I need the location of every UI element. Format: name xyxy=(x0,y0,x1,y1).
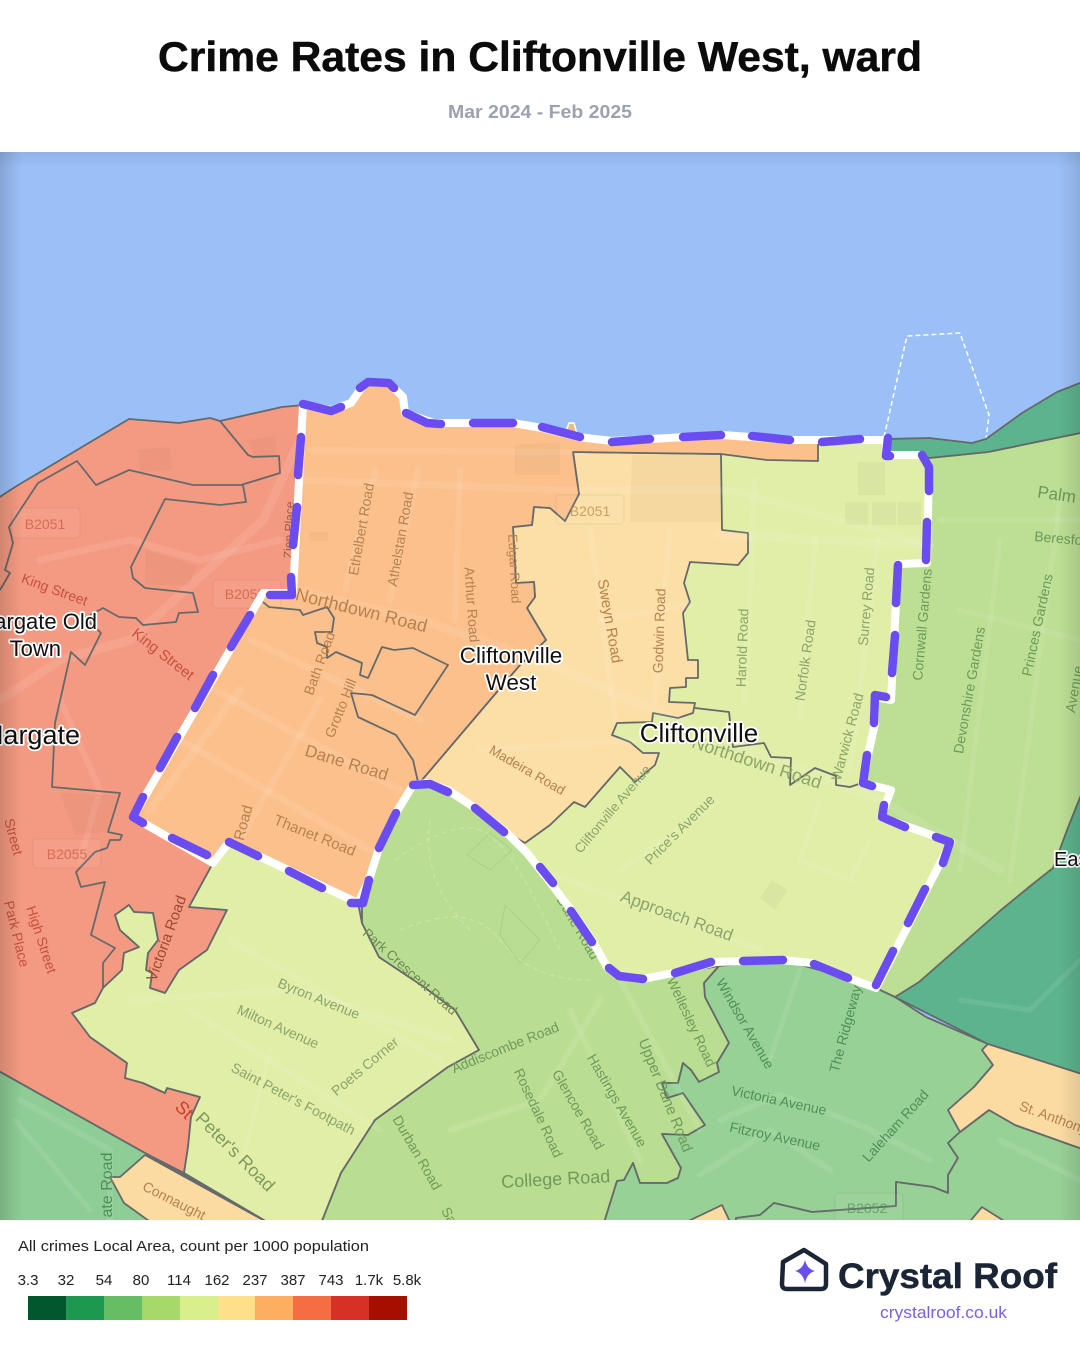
region: red west Margate xyxy=(0,405,303,1173)
road labels: red area: Zion Place xyxy=(281,501,297,558)
road labels: mid green areas xyxy=(99,482,1080,1227)
road labels: lime areas: Harold Road xyxy=(733,608,751,687)
pier outline xyxy=(884,333,989,443)
region: lime green east xyxy=(860,432,1080,997)
road labels: lime areas: Byron Avenue xyxy=(276,975,362,1022)
region: ward tan xyxy=(413,452,748,843)
place: Cliftonville West: Cliftonville xyxy=(460,643,562,668)
road labels: mid green areas: Wellesley Road xyxy=(664,975,719,1069)
logo url: crystalroof.co.uk xyxy=(880,1304,1008,1322)
logo: Crystal Roof xyxy=(782,1250,1057,1322)
road labels: tan edge areas xyxy=(140,1098,1080,1223)
road labels: mid green areas: Cornwall Gardens xyxy=(909,568,935,681)
jetty xyxy=(566,423,577,434)
road labels: red area: High Street xyxy=(23,904,60,975)
road labels: orange ward: Ethelbert Road xyxy=(345,482,377,577)
place: Cliftonville West: West xyxy=(486,670,537,695)
region: mid green Dane Park xyxy=(320,784,729,1226)
road labels: orange ward: Dane Road xyxy=(303,741,391,784)
park outlines xyxy=(467,833,540,963)
region: tan bottom right patch xyxy=(970,1206,1004,1220)
legend values: 80 xyxy=(133,1272,149,1289)
region: lime St Peter's xyxy=(72,842,479,1226)
road labels: red area: Victoria Road xyxy=(143,893,190,984)
region: green Victoria Avenue xyxy=(603,960,993,1226)
boundary lines: west Margate xyxy=(0,421,280,590)
road labels: mid green areas: Devonshire Gardens xyxy=(950,626,988,755)
road labels: red area: Street xyxy=(1,817,26,857)
place: Cliftonville West xyxy=(460,643,562,695)
choropleth map xyxy=(0,152,1080,1227)
road labels: orange ward: Bath Road xyxy=(300,629,338,697)
legend values: 32 xyxy=(58,1272,74,1289)
road labels: lime areas: Peter's Road xyxy=(192,1108,279,1195)
road labels: mid green areas: Victoria Avenue xyxy=(730,1082,828,1118)
legend xyxy=(18,1238,422,1320)
road labels: orange ward: Athelstan Road xyxy=(384,491,416,588)
road labels: mid green areas: Laleham Road xyxy=(859,1086,932,1165)
place name labels xyxy=(0,609,1080,871)
legend values: 387 xyxy=(280,1272,306,1289)
road labels: mid green areas: Dane Road xyxy=(554,893,603,962)
road labels: orange ward: Madeira Road xyxy=(487,742,568,798)
boundary lines: Margate centre xyxy=(52,485,246,988)
date range subtitle: Mar 2024 - Feb 2025 xyxy=(448,101,632,122)
road labels: mid green areas: Hastings Avenue xyxy=(584,1051,651,1150)
road labels: orange ward: Northdown Road xyxy=(293,584,429,636)
boundary lines: Northdown lime xyxy=(695,708,862,787)
road labels: mid green areas: College Road xyxy=(501,1166,611,1192)
legend values xyxy=(18,1272,422,1289)
road labels: orange ward: Road xyxy=(231,803,257,842)
road labels: red area: B2055 xyxy=(47,846,87,862)
road labels: red area: King Street xyxy=(128,625,198,685)
legend values: 5.8k xyxy=(393,1272,422,1289)
road labels: red area xyxy=(1,501,297,984)
legend colour scale xyxy=(28,1296,407,1320)
edge shading xyxy=(0,152,1080,1220)
region: south-west green xyxy=(0,1070,226,1220)
region: tan Connaught xyxy=(109,1154,262,1220)
road labels: mid green areas: Windsor Avenue xyxy=(713,975,778,1072)
road labels: lime areas: Poets Corner xyxy=(328,1033,402,1099)
legend values: 743 xyxy=(318,1272,344,1289)
boundary lines: south-west ward orange xyxy=(263,602,448,782)
darker block patches xyxy=(60,436,921,910)
title: Crime Rates in Cliftonville West, ward xyxy=(158,33,922,80)
road labels: orange ward: B2051 xyxy=(570,503,610,519)
place: Margate Old Town: Town xyxy=(10,636,61,661)
ward boundary purple dashes xyxy=(133,382,950,985)
road labels: orange ward xyxy=(231,482,668,860)
place: Margate Old Town xyxy=(0,609,97,661)
region: green lower Victoria strip xyxy=(736,1110,1080,1226)
faint road network xyxy=(0,440,1080,1220)
road labels: orange ward: Thanet Road xyxy=(271,812,358,860)
Dane Park paths xyxy=(395,820,590,980)
legend values: 3.3 xyxy=(18,1272,38,1289)
road labels: mid green areas: Palm xyxy=(1036,482,1077,507)
road labels: orange ward: Edgar Road xyxy=(505,534,524,604)
road labels: lime areas: Park Crescent Road xyxy=(360,925,460,1018)
icon: house with sparkle xyxy=(782,1250,826,1289)
road labels: lime areas: Northdown Road xyxy=(690,732,824,793)
region: ward orange xyxy=(133,382,818,903)
road labels: mid green areas: ate Road xyxy=(99,1153,116,1217)
road labels: lime areas: Surrey Road xyxy=(855,567,877,646)
road labels: mid green areas: Glencoe Road xyxy=(549,1067,608,1152)
legend title: All crimes Local Area, count per 1000 population xyxy=(18,1238,369,1255)
road labels: red area: B2051 xyxy=(25,516,65,532)
road labels: orange ward: Sweyn Road xyxy=(594,578,625,665)
road shields xyxy=(12,495,903,1223)
road labels: mid green areas: The Ridgeway xyxy=(826,983,864,1074)
road labels: orange ward: Godwin Road xyxy=(650,588,668,673)
road labels: lime areas: Milton Avenue xyxy=(235,1001,322,1052)
inner area boundary lines xyxy=(0,421,862,988)
region: tan St Anthony xyxy=(948,1044,1080,1150)
road labels: mid green areas: Princes Gardens xyxy=(1018,572,1056,678)
road labels: mid green areas: Upper Dane Road xyxy=(635,1036,696,1155)
region: dark green east xyxy=(895,785,1080,1075)
logo wordmark: Crystal Roof xyxy=(838,1257,1057,1296)
legend values: 237 xyxy=(242,1272,268,1289)
road labels: lime areas: Norfolk Road xyxy=(791,619,819,702)
road labels: lime areas: Saint Peter's Footpath xyxy=(229,1059,358,1138)
road labels: mid green areas: Sa xyxy=(438,1204,461,1227)
legend values: 114 xyxy=(167,1272,191,1289)
road labels: lime areas: Approach Road xyxy=(618,887,736,945)
road labels: mid green areas: Fitzroy Avenue xyxy=(728,1119,822,1154)
road labels: red area: Park Place xyxy=(1,899,33,969)
place: Cliftonville: Cliftonville xyxy=(640,718,758,748)
legend values: 54 xyxy=(96,1272,112,1289)
road labels: red area: King Street xyxy=(19,570,90,609)
ward boundary white line xyxy=(133,382,951,988)
road labels: mid green areas: B2052 xyxy=(847,1200,887,1216)
road labels: tan edge areas: Connaught xyxy=(140,1178,209,1223)
region: dark green coast strip xyxy=(886,381,1080,458)
road labels: mid green areas: Addiscombe Road xyxy=(449,1019,561,1076)
road labels: lime areas: Cliftonville Avenue xyxy=(571,762,654,856)
road labels: red area: B2055 xyxy=(225,586,265,602)
map regions xyxy=(0,381,1080,1226)
road labels: lime areas xyxy=(192,567,877,1195)
road labels: orange ward: Grotto Hill xyxy=(321,676,359,740)
legend values: 162 xyxy=(204,1272,230,1289)
region: tan bottom patches xyxy=(688,1204,730,1220)
road labels: mid green areas: Durban Road xyxy=(390,1112,445,1193)
road labels: mid green areas: Rosedale Road xyxy=(511,1066,566,1160)
St Peter's prefix label: St xyxy=(171,1097,197,1123)
road labels: orange ward: Arthur Road xyxy=(461,566,483,643)
road labels: lime areas: Price's Avenue xyxy=(641,791,718,868)
region: ward lime base xyxy=(522,444,944,982)
sea xyxy=(0,152,1080,1220)
road labels: lime areas: Warwick Road xyxy=(828,691,867,782)
legend values: 1.7k xyxy=(355,1272,384,1289)
